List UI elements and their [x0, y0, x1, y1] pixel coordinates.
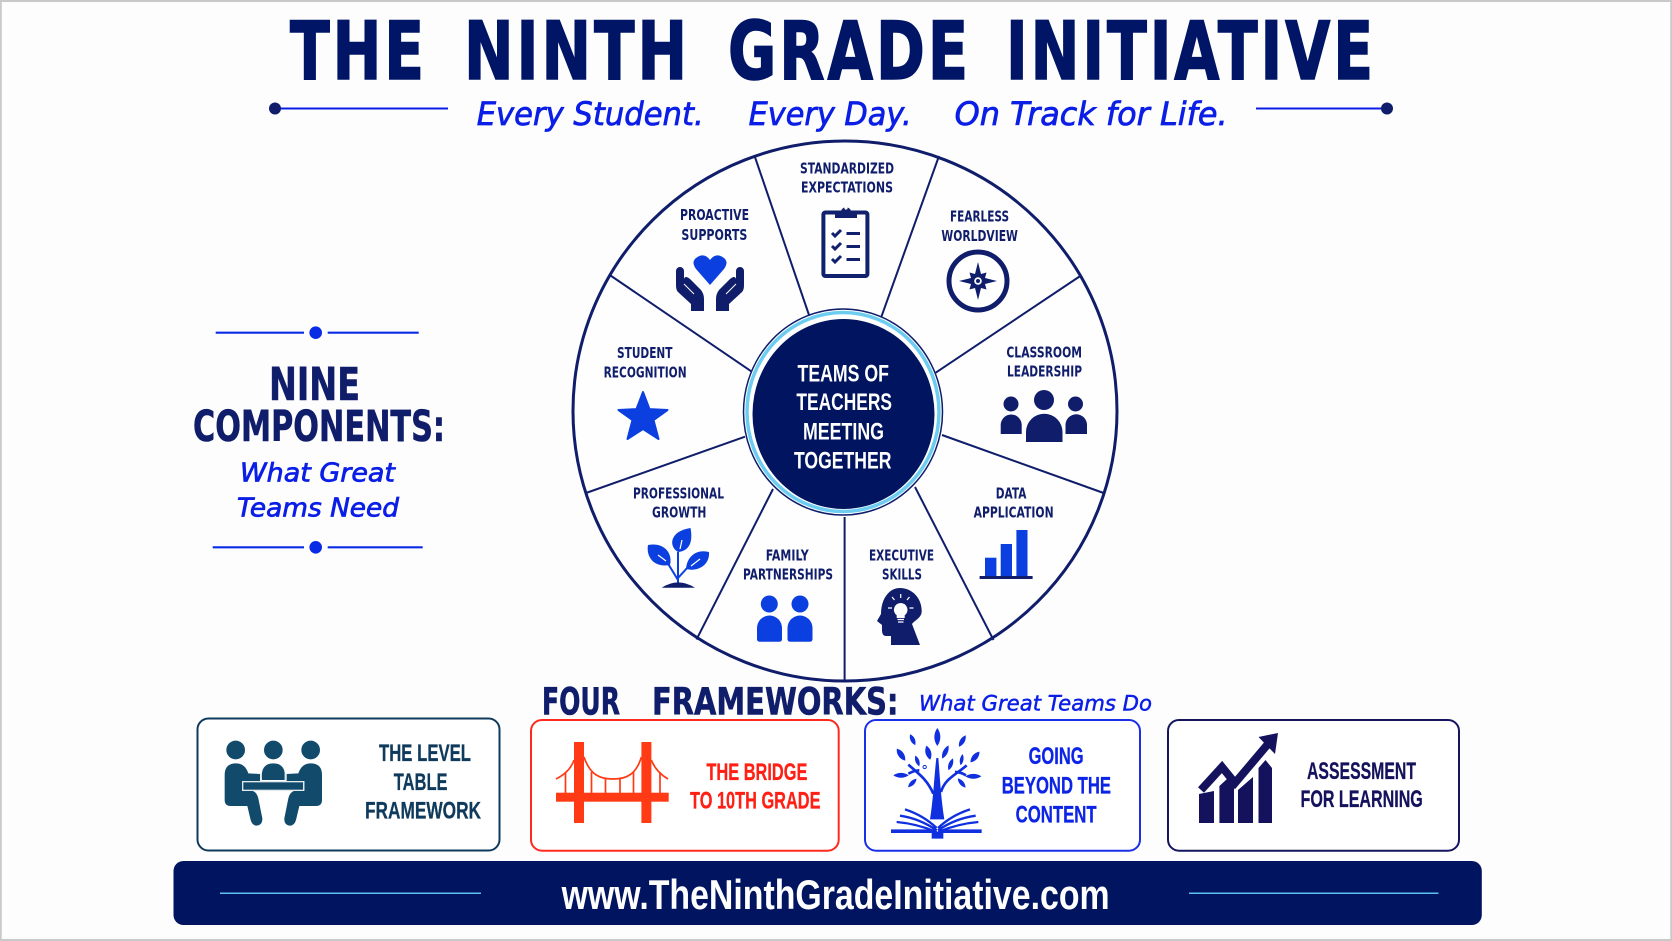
title: GRADE: [728, 5, 971, 98]
segment: professional growth: PROFESSIONAL: [633, 484, 724, 502]
hub: teams of teachers meeting together: TEAMS OF: [798, 361, 889, 388]
segment: fearless worldview: [941, 208, 1018, 310]
segment: student recognition: RECOGNITION: [604, 363, 687, 381]
segment: professional growth: GROWTH: [652, 504, 706, 522]
segment: standardized expectations: STANDARDIZED: [800, 160, 894, 178]
segment: fearless worldview: WORLDVIEW: [941, 227, 1018, 245]
segment: proactive supports: SUPPORTS: [681, 226, 747, 244]
segment: fearless worldview: FEARLESS: [950, 208, 1009, 226]
subtitle with rules: On Track for Life.: [955, 95, 1228, 133]
icon: compass: [949, 252, 1007, 310]
footer banner with url: www.TheNinthGradeInitiative.com: [561, 871, 1110, 918]
segment: classroom leadership: CLASSROOM: [1006, 343, 1082, 361]
icon: two people: [757, 596, 812, 642]
segment: standardized expectations: EXPECTATIONS: [801, 179, 893, 197]
hub: teams of teachers meeting together: [744, 309, 942, 515]
segment: data application: [974, 484, 1054, 579]
card: the level table framework: THE LEVEL: [379, 740, 471, 767]
card: the bridge to 10th grade: [531, 720, 839, 851]
card: the bridge to 10th grade: TO 10TH GRADE: [690, 787, 820, 814]
panel: nine components: COMPONENTS:: [193, 402, 445, 452]
card: going beyond the content: [865, 720, 1140, 851]
title: NINTH: [464, 5, 690, 98]
title: INITIATIVE: [1006, 5, 1376, 98]
icon: hands holding heart: [676, 255, 744, 311]
segment: executive skills: SKILLS: [882, 565, 922, 583]
card: assessment for learning: ASSESSMENT: [1307, 758, 1416, 785]
hub: teams of teachers meeting together: TOGETHER: [794, 447, 892, 474]
panel: nine components: [193, 326, 445, 554]
card: the level table framework: TABLE: [394, 769, 448, 796]
segment: student recognition: [604, 344, 687, 439]
card: the level table framework: [198, 718, 500, 850]
segment: executive skills: EXECUTIVE: [869, 546, 934, 564]
card: assessment for learning: FOR LEARNING: [1300, 786, 1423, 813]
segment: standardized expectations: [800, 160, 894, 276]
icon: bridge: [556, 742, 669, 823]
card: the level table framework: FRAMEWORK: [365, 798, 481, 825]
icon: head with lightbulb: [877, 588, 922, 645]
icon: three people: [1001, 390, 1087, 442]
segment: data application: APPLICATION: [974, 504, 1054, 522]
card: going beyond the content: GOING: [1029, 743, 1084, 770]
segment: professional growth: [633, 484, 724, 588]
card: the bridge to 10th grade: THE BRIDGE: [706, 759, 807, 786]
panel: nine components: What Great: [240, 459, 396, 489]
subtitle with rules: [269, 95, 1393, 133]
segment: family partnerships: [743, 546, 833, 642]
title: THE: [290, 5, 427, 98]
subtitle with rules: Every Day.: [749, 95, 912, 133]
card: going beyond the content: BEYOND THE: [1002, 773, 1111, 800]
hub: teams of teachers meeting together: MEETING: [803, 418, 884, 445]
wheel: nine components: [573, 141, 1117, 681]
title: [290, 5, 1376, 98]
icon: tree growing from book: [891, 728, 982, 839]
heading: four frameworks: What Great Teams Do: [919, 692, 1152, 717]
footer banner with url: [174, 861, 1482, 925]
heading: four frameworks: [542, 680, 1152, 723]
segment: data application: DATA: [996, 484, 1027, 502]
segment: classroom leadership: [1001, 343, 1087, 442]
icon: plant: [648, 528, 709, 588]
segment: proactive supports: [676, 206, 749, 311]
hub: teams of teachers meeting together: TEACHERS: [796, 389, 892, 416]
segment: student recognition: STUDENT: [617, 344, 673, 362]
segment: executive skills: [869, 546, 934, 645]
icon: clipboard: [823, 206, 867, 276]
icon: star: [618, 392, 668, 439]
heading: four frameworks: FRAMEWORKS:: [652, 680, 898, 723]
segment: family partnerships: PARTNERSHIPS: [743, 565, 833, 583]
segment: classroom leadership: LEADERSHIP: [1007, 363, 1082, 381]
heading: four frameworks: FOUR: [542, 680, 620, 723]
card: going beyond the content: CONTENT: [1016, 801, 1097, 828]
icon: bar chart: [980, 530, 1033, 579]
panel: nine components: Teams Need: [237, 494, 399, 524]
segment: family partnerships: FAMILY: [766, 546, 810, 564]
card: assessment for learning: [1168, 720, 1459, 851]
panel: nine components: NINE: [269, 358, 360, 411]
icon: rising chart with arrow: [1199, 733, 1278, 823]
segment: proactive supports: PROACTIVE: [680, 206, 749, 224]
subtitle with rules: Every Student.: [477, 95, 704, 133]
icon: people at table: [225, 741, 322, 826]
